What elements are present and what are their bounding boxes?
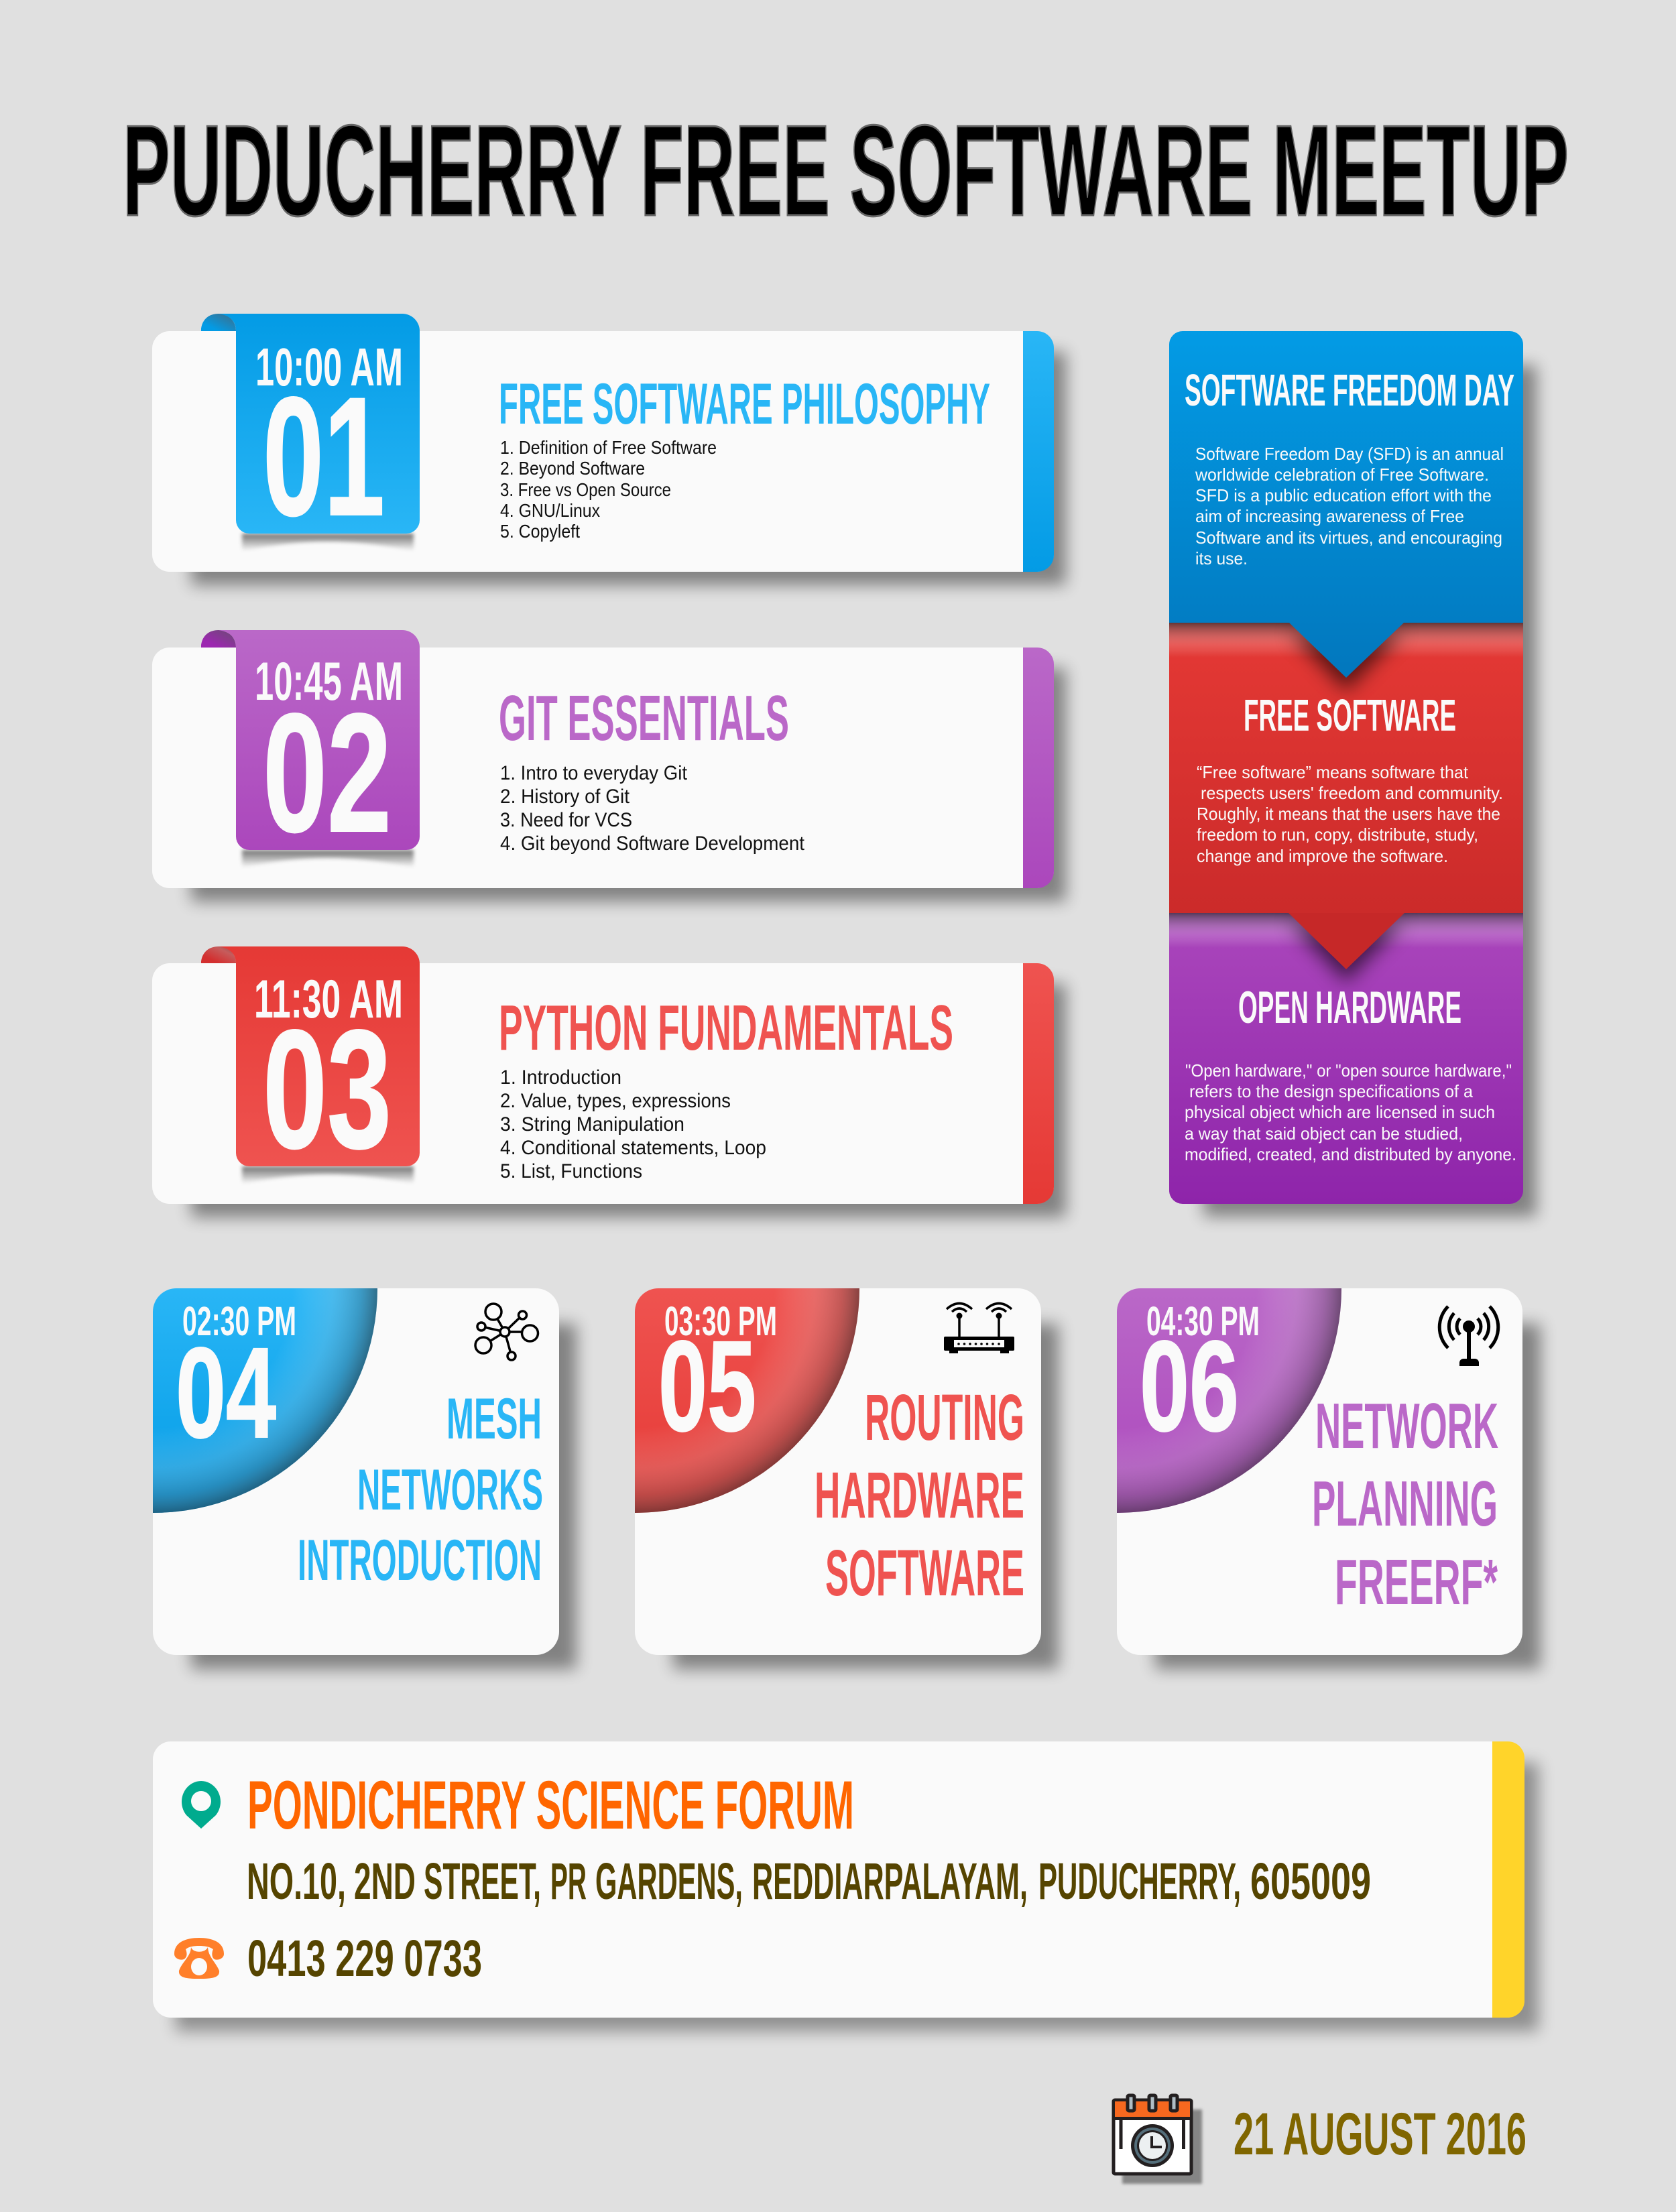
ribbon shadow [242,1166,414,1184]
heading: PYTHON FUNDAMENTALS [499,992,953,1064]
time badge [219,630,420,867]
topic list [500,762,805,855]
panel: session 03 python fundamentals [152,946,1066,1217]
accent bar [1492,1741,1524,2018]
icon: calendar with clock [1114,2095,1202,2184]
topic list: 1. Definition of Free Software [500,437,717,458]
address: PUDUCHERRY, [1038,1853,1241,1910]
body text: Roughly, it means that the users have the [1197,804,1500,824]
number: 02 [263,679,392,867]
accent bar [1023,963,1054,1204]
panel: session 04 mesh networks [153,1288,577,1669]
address: PR [550,1853,587,1910]
topic lines: MESH [446,1387,542,1451]
topic list [500,437,717,542]
topic list: 4. Conditional statements, Loop [500,1137,766,1159]
topic lines: NETWORKS [357,1458,543,1522]
time: 02:30 PM [182,1298,296,1344]
time badge [219,314,420,551]
address: REDDIARPALAYAM, [752,1853,1028,1910]
body text: freedom to run, copy, distribute, study, [1197,824,1478,845]
topic lines [298,1387,543,1593]
number: 06 [1140,1314,1239,1458]
address: GARDENS, [595,1853,743,1910]
topic lines [1312,1390,1498,1618]
topic list: 2. Beyond Software [500,458,645,479]
topic lines: SOFTWARE [825,1536,1024,1609]
body text: modified, created, and distributed by anyone. [1185,1144,1516,1164]
topic list: 3. Free vs Open Source [500,479,671,500]
body text: SFD is a public education effort with the [1195,485,1492,505]
panel: session 05 routing [635,1288,1059,1669]
topic list: 3. String Manipulation [500,1113,684,1135]
body text: aim of increasing awareness of Free [1195,506,1464,526]
arrow into open hardware [1289,913,1404,969]
topic list: 4. GNU/Linux [500,500,600,521]
panel: session 06 network planning [1117,1288,1541,1669]
topic list: 5. Copyleft [500,521,580,542]
panel: session 01 free software philosophy [152,314,1066,585]
address: 605009 [1250,1853,1371,1910]
icon: telephone [174,1938,224,1979]
panel: session 02 git essentials [152,630,1066,902]
icon: router [944,1303,1014,1353]
body text: physical object which are licensed in such [1185,1102,1495,1122]
ribbon fold [201,630,236,648]
topic list: 1. Intro to everyday Git [500,762,688,784]
topic list: 3. Need for VCS [500,809,632,831]
topic lines: HARDWARE [815,1459,1024,1532]
body text: refers to the design specifications of a [1189,1081,1474,1101]
body text: Software Freedom Day (SFD) is an annual [1195,444,1504,464]
body text: "Open hardware," or "open source hardware," [1185,1060,1512,1081]
time: 10:45 AM [255,652,403,712]
heading: GIT ESSENTIALS [499,682,789,754]
topic lines [815,1381,1024,1609]
accent bar [1023,331,1054,572]
body text: “Free software” means software that [1197,762,1469,782]
quarter circle [635,1288,859,1513]
panel: right info column [1169,331,1537,1217]
heading: OPEN HARDWARE [1238,982,1461,1033]
number: 01 [263,363,385,551]
body text: respects users' freedom and community. [1201,783,1503,803]
section: software freedom day [1169,331,1523,678]
topic list: 4. Git beyond Software Development [500,833,805,855]
time: 03:30 PM [664,1298,777,1344]
accent bar [1023,648,1054,888]
icon: antenna [1439,1306,1498,1366]
number: 04 [176,1320,276,1465]
body text [1195,444,1504,568]
topic list: 5. List, Functions [500,1160,642,1182]
topic list [500,1066,766,1182]
topic list: 2. Value, types, expressions [500,1090,731,1112]
panel: venue [153,1741,1539,2031]
venue name: PONDICHERRY SCIENCE FORUM [247,1767,854,1843]
address: NO.10, [247,1853,346,1910]
body text: worldwide celebration of Free Software. [1195,465,1489,485]
quarter circle [153,1288,377,1513]
quarter circle [1117,1288,1341,1513]
body text [1197,762,1503,866]
icon: map pin [182,1781,221,1829]
time: 10:00 AM [255,337,403,397]
topic lines: PLANNING [1312,1468,1498,1540]
time: 11:30 AM [254,969,403,1030]
body text: a way that said object can be studied, [1185,1123,1463,1144]
topic lines: NETWORK [1315,1390,1498,1462]
ribbon fold [201,946,236,963]
ribbon fold [201,314,236,331]
section: free software [1169,623,1523,969]
body text: Software and its virtues, and encouraging [1195,528,1502,548]
topic lines: ROUTING [865,1381,1024,1454]
icon: mesh network [475,1304,538,1360]
body text: change and improve the software. [1197,846,1448,866]
address: 2ND [354,1853,416,1910]
topic list: 2. History of Git [500,786,630,808]
heading: FREE SOFTWARE PHILOSOPHY [499,372,990,436]
topic list: 1. Introduction [500,1066,621,1089]
number: 05 [658,1314,756,1458]
time: 04:30 PM [1146,1298,1260,1344]
time badge [219,946,420,1184]
section: open hardware [1169,913,1523,1204]
phone number: 0413 229 0733 [247,1930,482,1987]
address: STREET, [424,1853,541,1910]
ribbon shadow [242,850,414,867]
topic lines: FREERF* [1335,1546,1498,1618]
number: 03 [263,995,392,1184]
address [247,1853,1371,1910]
body text: its use. [1195,548,1248,568]
topic lines: INTRODUCTION [298,1528,542,1593]
heading: FREE SOFTWARE [1244,690,1456,741]
ribbon shadow [242,534,414,551]
body text [1185,1060,1516,1164]
